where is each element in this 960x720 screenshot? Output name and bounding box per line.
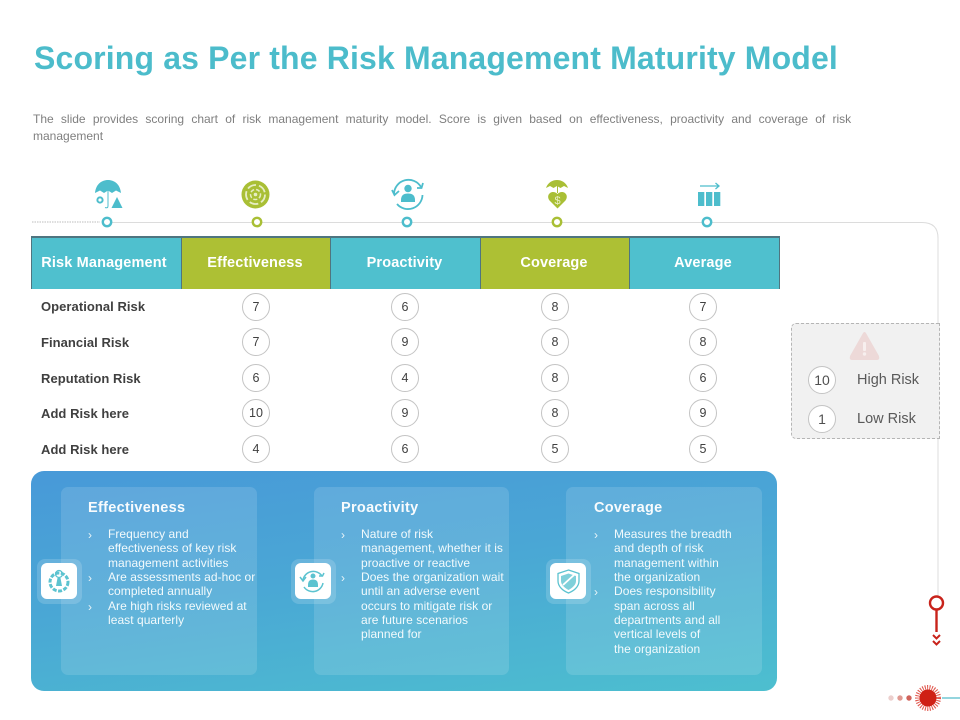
card: proactivity: Nature of risk management, whether it is proactive or reactive Does the organization wait until an adverse event occurs to mitigate risk or are future scenarios planned for (361, 527, 504, 641)
table header (31, 236, 780, 289)
intro text (33, 112, 851, 142)
row: reputation risk: 6 (700, 371, 706, 385)
row: reputation risk: 6 (253, 371, 259, 385)
legend: low risk: Low Risk (857, 411, 916, 427)
row: add risk here: 6 (402, 442, 408, 456)
icon: gear bell badge (37, 559, 82, 604)
row: financial risk (41, 328, 717, 356)
icon: umbrella over dollar heart (546, 180, 568, 208)
row: add risk here: 5 (552, 442, 558, 456)
row: reputation risk: Reputation Risk (41, 371, 141, 386)
legend: low risk (808, 405, 916, 433)
row: operational risk: 7 (253, 300, 259, 314)
card: coverage: › (594, 528, 598, 542)
row: reputation risk: 8 (552, 371, 558, 385)
row: add risk here: 8 (552, 406, 558, 420)
row: financial risk: 9 (402, 335, 408, 349)
icon: umbrella over dollar heart: $ (554, 195, 561, 207)
title: Scoring as Per the Risk Management Maturity Model (34, 40, 838, 76)
legend: high risk: 10 (814, 372, 830, 388)
card: coverage: › (594, 585, 598, 599)
red end marker with chevrons (928, 595, 944, 646)
row: operational risk: 6 (402, 300, 408, 314)
header: proactivity: Proactivity (367, 255, 442, 271)
row: financial risk: Financial Risk (41, 335, 129, 350)
red burst with dots (888, 685, 960, 711)
row: operational risk (41, 293, 717, 321)
card: coverage: Measures the breadth and depth of risk management within the organization Does responsibility span across all departments and all vertical levels of the organization (614, 527, 732, 656)
row: add risk here (41, 435, 717, 463)
row: add risk here: 9 (402, 406, 408, 420)
header: risk management (31, 236, 181, 289)
row: add risk here: 9 (700, 406, 706, 420)
header: coverage (480, 236, 629, 289)
icon: person with cycle arrows (391, 178, 424, 210)
row: operational risk: 8 (552, 300, 558, 314)
card: proactivity (314, 487, 509, 675)
card: effectiveness (61, 487, 257, 675)
legend: high risk (808, 366, 919, 394)
card: effectiveness: › (88, 600, 92, 614)
header: effectiveness: Effectiveness (207, 255, 303, 271)
header: risk management: Risk Management (41, 255, 167, 271)
header: proactivity (330, 236, 480, 289)
row: add risk here: 10 (249, 406, 263, 420)
row: operational risk: 7 (700, 300, 706, 314)
card: proactivity: › (341, 528, 345, 542)
row: add risk here: Add Risk here (41, 442, 129, 457)
header: coverage: Coverage (520, 255, 588, 271)
row: financial risk: 8 (700, 335, 706, 349)
row: add risk here: Add Risk here (41, 406, 129, 421)
icon: shield badge (546, 559, 591, 604)
row: add risk here: 4 (253, 442, 259, 456)
card: proactivity: › (341, 571, 345, 585)
card: effectiveness: Effectiveness (88, 500, 185, 516)
header: average: Average (674, 255, 732, 271)
icon: umbrella with gear and warning (95, 180, 122, 208)
row: reputation risk (41, 364, 717, 392)
header: average (629, 236, 779, 289)
blue gradient panel (31, 471, 777, 691)
header: effectiveness (181, 236, 330, 289)
legend panel (791, 323, 940, 439)
intro text: management (33, 128, 103, 142)
card: effectiveness: Frequency and effectiveness of key risk management activities Are assessments ad-hoc or completed annually Are high risks reviewed at least quarterly (108, 527, 255, 627)
icon: person cycle badge (291, 559, 336, 604)
row: operational risk: Operational Risk (41, 299, 145, 314)
card: effectiveness: › (88, 571, 92, 585)
row: financial risk: 8 (552, 335, 558, 349)
row: reputation risk: 4 (402, 371, 408, 385)
row: financial risk: 7 (253, 335, 259, 349)
row: add risk here: 5 (700, 442, 706, 456)
icon: circular target (242, 180, 270, 208)
card: proactivity: Proactivity (341, 500, 418, 516)
card: coverage: Coverage (594, 500, 662, 516)
row: add risk here (41, 399, 717, 427)
intro text: The slide provides scoring chart of risk management maturity model. Score is given based on effectiveness, proactivity and coverage of risk (33, 112, 851, 126)
card: coverage (566, 487, 762, 675)
icon: warning triangle (850, 332, 880, 360)
legend: low risk: 1 (818, 411, 826, 427)
card: effectiveness: › (88, 528, 92, 542)
icon: bars with arrow (698, 182, 720, 206)
legend: high risk: High Risk (857, 372, 919, 388)
